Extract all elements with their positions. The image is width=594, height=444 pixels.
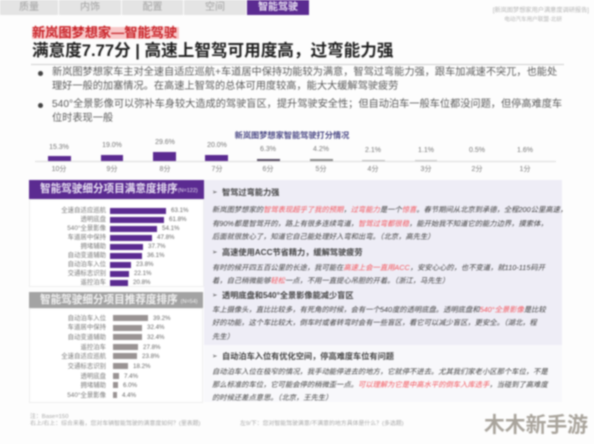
satisfaction bar chart: 36.1% <box>147 252 165 258</box>
panel: parking quote: 那么标准的车位，它可能会停的稍微歪一点。可以理解为它是中高水平的倒车入库选手，当碰到了高难度 <box>212 380 548 389</box>
satisfaction bar chart: 车道居中保持 <box>68 234 106 240</box>
panel: parking quote: 自动泊车入位在极窄的情况，我手动能停进去的地方，它就停不进去。尤其我们家老小区那个车位，不是 <box>212 367 548 376</box>
satisfaction bar chart: 20.8% <box>133 278 151 286</box>
score distribution chart: 20.0% <box>207 142 227 149</box>
quote group: transparent chassis: 好的功能，这个车比较大，倒车时或者转弯时会有一些盲区，看它可以减少盲区，更安全。（湖北，程 <box>212 318 537 327</box>
panel: parking quote: 的时候还差点意思。（北京，王先生） <box>212 393 332 402</box>
panel: recommendation ranking <box>29 292 203 403</box>
quote group: ACC: 高速使用ACC节省精力，缓解驾驶疲劳 <box>222 248 363 257</box>
satisfaction bar chart: 交通标志识别 <box>68 270 106 276</box>
panel: parking quote <box>204 345 562 402</box>
satisfaction bar chart: 自动泊车入位 <box>68 260 106 268</box>
score distribution chart: 4.2% <box>313 146 329 153</box>
satisfaction bar chart: 22.1% <box>134 270 152 276</box>
recommendation bar chart: 6.0% <box>123 382 137 388</box>
navigation tabs: 空间 <box>205 2 225 13</box>
summary bullets <box>37 66 562 124</box>
score distribution chart: 新岚图梦想家智能驾驶打分情况 <box>235 131 349 140</box>
quote group: cornering: 智驾过弯能力强 <box>222 188 279 197</box>
score distribution chart: 6分 <box>263 166 273 173</box>
quote group: ACC: 着，自己稍微能够轻松一点，不用一直提心吊胆的开着。（浙江，马先生） <box>212 276 449 285</box>
recommendation bar chart: 18.2% <box>133 362 151 370</box>
summary bullets: 新岚图梦想家车主对全速自适应巡航+车道居中保持功能较为满意，智驾过弯能力强，跟车加减速不突兀，也能处 <box>52 67 557 78</box>
navigation tabs: 质量 <box>19 2 39 13</box>
score distribution chart: 2.1% <box>365 147 381 154</box>
watermark: 木木新手游 <box>484 414 588 437</box>
quote group: cornering <box>212 187 567 241</box>
quote group: ACC: 有时的候开四五百公里的长途，我可能在高速上会一直用ACC，安安心心的，也不变道，就110-115码开 <box>212 263 545 272</box>
quote group: transparent chassis: ➢ <box>212 292 217 299</box>
satisfaction bar chart: 全速自适应巡航 <box>61 206 106 214</box>
satisfaction bar chart: 63.1% <box>171 206 189 214</box>
report source note <box>492 6 590 23</box>
satisfaction ranking heading: 智能驾驶细分项目满意度排序(N=122) <box>40 183 198 195</box>
summary bullets: 位时表现一般 <box>52 113 113 124</box>
recommendation bar chart: 7.4% <box>124 372 138 380</box>
satisfaction bar chart: 54.1% <box>162 224 180 232</box>
quote group: ACC: ➢ <box>212 249 217 256</box>
score distribution chart: 0.5% <box>469 147 485 154</box>
navigation tabs: 内饰 <box>80 2 100 13</box>
quote group: transparent chassis: 先生） <box>212 332 234 341</box>
score distribution chart: 2分 <box>472 166 482 173</box>
score distribution chart <box>35 130 556 173</box>
score distribution chart: 7分 <box>212 166 222 173</box>
score distribution chart: 3分 <box>421 166 431 173</box>
summary bullets: 540°全景影像可以弥补车身较大造成的驾驶盲区，提升驾驶安全性；但自动泊车一般车位都没问题，但停高难度车 <box>52 99 562 110</box>
satisfaction bar chart: 遥控泊车 <box>80 278 106 286</box>
recommendation bar chart: 遥控泊车 <box>80 344 106 350</box>
satisfaction bar chart <box>29 199 204 287</box>
quote group: transparent chassis: 车上摄像头，直比比较多，有死角的时候，会有一个540度的透明底盘。透明底盘和540°全景影像是比较 <box>212 305 546 314</box>
score distribution chart: 4分 <box>368 166 378 173</box>
satisfaction bar chart: 拥堵辅助 <box>80 242 106 250</box>
recommendation bar chart: 全速自适应巡航 <box>61 352 106 360</box>
panel: parking quote: 自动泊车入位有优化空间，停高难度车位有问题 <box>222 352 394 361</box>
navigation tabs <box>0 0 310 16</box>
quote group: transparent chassis: 透明底盘和540°全景影像能减少盲区 <box>222 291 354 300</box>
recommendation bar chart: 540°全景影像 <box>67 392 106 398</box>
panel: user quotes <box>204 180 562 345</box>
satisfaction bar chart: 540°全景影像 <box>67 224 106 232</box>
recommendation bar chart: 39.2% <box>153 314 171 322</box>
recommendation bar chart: 32.4% <box>147 334 165 340</box>
title <box>31 24 394 60</box>
report source note: 电动汽车用户联盟·北研 <box>504 17 562 23</box>
quote group: cornering: ➢ <box>212 189 217 196</box>
score distribution chart: 19.0% <box>102 142 122 149</box>
recommendation bar chart: 自动泊车入位 <box>68 314 106 322</box>
footnotes: 左9/下：您对智能驾驶满意/不满意的地方具体是什么？(多选题) <box>240 421 404 427</box>
panel: satisfaction ranking <box>29 180 204 287</box>
recommendation bar chart: 透明底盘 <box>80 372 106 380</box>
score distribution chart: 15.3% <box>49 144 69 151</box>
satisfaction bar chart: 37.7% <box>148 242 166 250</box>
satisfaction bar chart: 透明底盘 <box>80 216 106 222</box>
title: 新岚图梦想家—智能驾驶 <box>32 25 177 40</box>
score distribution chart: 8分 <box>160 166 170 173</box>
satisfaction ranking heading <box>29 180 204 199</box>
footnotes: 注：Base=150 <box>30 414 68 420</box>
recommendation bar chart: 车道居中保持 <box>68 324 106 331</box>
recommendation bar chart: 拥堵辅助 <box>80 382 106 388</box>
quote group: cornering: 新岚图梦想家的智驾表现超乎了我的预期，过弯能力是一个惊喜。春节期间从北京到承德，全程200公里高速， <box>212 205 567 214</box>
recommendation ranking heading <box>29 292 203 308</box>
navigation tabs: 配置 <box>142 2 162 13</box>
satisfaction bar chart: 61.8% <box>169 216 187 222</box>
satisfaction bar chart: 23.8% <box>136 260 154 268</box>
recommendation bar chart: 交通标志识别 <box>68 362 106 370</box>
score distribution chart: 9分 <box>107 166 117 173</box>
score distribution chart: 10分 <box>52 166 66 173</box>
quote group: ACC <box>212 247 546 285</box>
panel: parking quote: ➢ <box>212 353 217 360</box>
recommendation bar chart: 自动变道辅助 <box>68 334 106 340</box>
quote group: cornering: 有90%都是智驾开的，路上有很多连续弯道，智驾过弯都很稳，能开始我不知道它的能力边界，摸索体， <box>212 219 548 228</box>
score distribution chart: 1.6% <box>517 147 533 154</box>
satisfaction bar chart: 自动变道辅助 <box>68 252 106 258</box>
recommendation ranking heading: 智能驾驶细分项目推荐度排序 (N=54) <box>40 294 198 306</box>
quote group: transparent chassis <box>212 290 547 341</box>
summary bullets: 理好一般的加塞情况。在高速上智驾的总体可用度较高，能大大缓解驾驶疲劳 <box>52 81 398 92</box>
report source note: [新岚图梦想家用户满意度调研报告] <box>493 7 589 14</box>
score distribution chart: 6.3% <box>260 146 276 153</box>
recommendation bar chart: 23.8% <box>142 352 160 360</box>
score distribution chart: 29.6% <box>155 139 175 146</box>
recommendation bar chart: 32.4% <box>147 324 165 331</box>
title: 满意度7.77分 | 高速上智驾可用度高，过弯能力强 <box>32 41 393 60</box>
footnotes <box>30 412 404 427</box>
score distribution chart: 1.1% <box>418 147 434 154</box>
quote group: cornering: 后面就很放心了，知道它自己能处理好入弯和出弯。（北京，高先生） <box>212 232 435 241</box>
recommendation bar chart: 4.4% <box>122 392 136 398</box>
recommendation bar chart: 27.8% <box>143 344 161 350</box>
recommendation bar chart <box>29 308 203 403</box>
score distribution chart: 1分 <box>520 166 530 173</box>
score distribution chart: 5分 <box>316 166 326 173</box>
satisfaction bar chart: 47.8% <box>157 234 175 240</box>
navigation tabs: 智能驾驶 <box>258 2 298 13</box>
footnotes: 右上/右上：综合来看，您对车辆智能驾驶的满意度如何？(里表题) <box>30 421 200 427</box>
